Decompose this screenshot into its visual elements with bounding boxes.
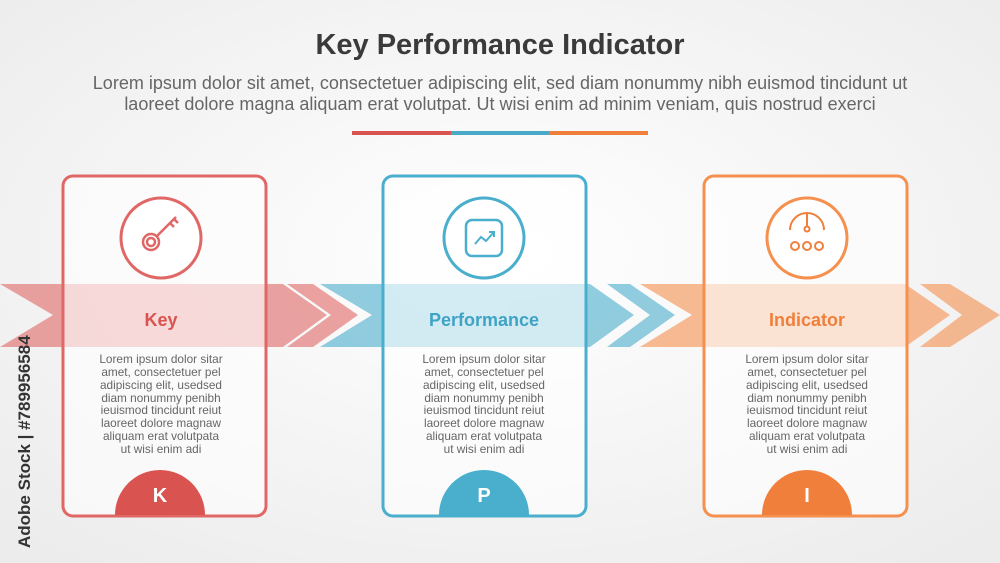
card: Performance <box>383 176 586 516</box>
icon: chart <box>444 198 524 278</box>
text block: ut wisi enim adi <box>767 442 847 456</box>
text block: diam nonummy penibh <box>424 391 544 405</box>
text block: amet, consectetuer pel <box>747 365 867 379</box>
badge K: K <box>153 485 168 507</box>
icon: gauge <box>767 198 847 278</box>
text block: ieuismod tincidunt reiut <box>424 403 545 417</box>
arrow band <box>0 284 1000 347</box>
text block: amet, consectetuer pel <box>424 365 544 379</box>
card: Indicator <box>704 176 907 516</box>
text block: ieuismod tincidunt reiut <box>747 403 868 417</box>
text block: laoreet dolore magnaw <box>101 416 221 430</box>
text block: adipiscing elit, usedsed <box>423 378 545 392</box>
text block <box>422 352 546 456</box>
text block: Lorem ipsum dolor sitar <box>745 352 869 366</box>
badge K <box>115 470 205 515</box>
text block: aliquam erat volutpata <box>426 429 542 443</box>
text block: adipiscing elit, usedsed <box>100 378 222 392</box>
badge I <box>762 470 852 515</box>
text block: ut wisi enim adi <box>121 442 201 456</box>
label Performance: Performance <box>429 310 539 330</box>
icon: key <box>121 198 201 278</box>
badge P <box>439 470 529 515</box>
divider tricolor <box>352 131 648 135</box>
text block: ut wisi enim adi <box>444 442 524 456</box>
text block: laoreet dolore magnaw <box>747 416 867 430</box>
text block: Lorem ipsum dolor sitar <box>99 352 223 366</box>
badge I: I <box>804 485 810 507</box>
text block: adipiscing elit, usedsed <box>746 378 868 392</box>
text block <box>99 352 223 456</box>
text block <box>745 352 869 456</box>
badge P: P <box>477 485 491 507</box>
text block: diam nonummy penibh <box>101 391 221 405</box>
text block: Lorem ipsum dolor sitar <box>422 352 546 366</box>
text block: amet, consectetuer pel <box>101 365 221 379</box>
text block: aliquam erat volutpata <box>749 429 865 443</box>
subtitle: Lorem ipsum dolor sit amet, consectetuer adipiscing elit, sed diam nonummy nibh euismod tincidunt ut <box>93 73 907 93</box>
label Key: Key <box>144 310 178 330</box>
text block: aliquam erat volutpata <box>103 429 219 443</box>
watermark id: Adobe Stock | #789956584 <box>15 335 34 548</box>
text block: ieuismod tincidunt reiut <box>101 403 222 417</box>
subtitle: laoreet dolore magna aliquam erat volutpat. Ut wisi enim ad minim veniam, quis nostrud exerci <box>124 94 876 114</box>
text block: laoreet dolore magnaw <box>424 416 544 430</box>
label Indicator: Indicator <box>769 310 845 330</box>
text block: diam nonummy penibh <box>747 391 867 405</box>
card: Key <box>63 176 266 516</box>
title: Key Performance Indicator <box>315 29 685 61</box>
subtitle <box>93 73 907 114</box>
